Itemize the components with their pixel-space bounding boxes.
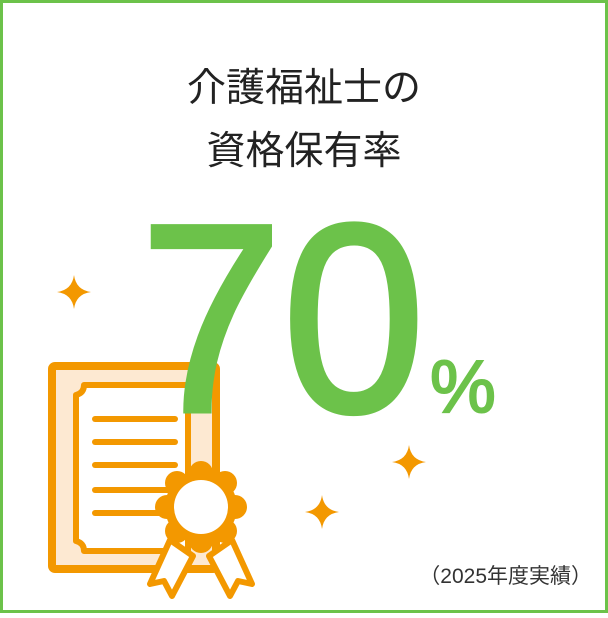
star: bottom: [305, 495, 339, 529]
title: 介護福祉士の: [187, 67, 421, 110]
footnote: （2025年度実績）: [419, 565, 592, 588]
icon: certificate: [52, 366, 216, 569]
star: left: [57, 275, 91, 309]
big number 70: 70: [140, 168, 425, 468]
title: [187, 67, 421, 173]
star: right: [392, 445, 426, 479]
icon: rosette seal: [150, 461, 252, 596]
percent sign: %: [430, 345, 496, 428]
title: 資格保有率: [206, 130, 402, 173]
